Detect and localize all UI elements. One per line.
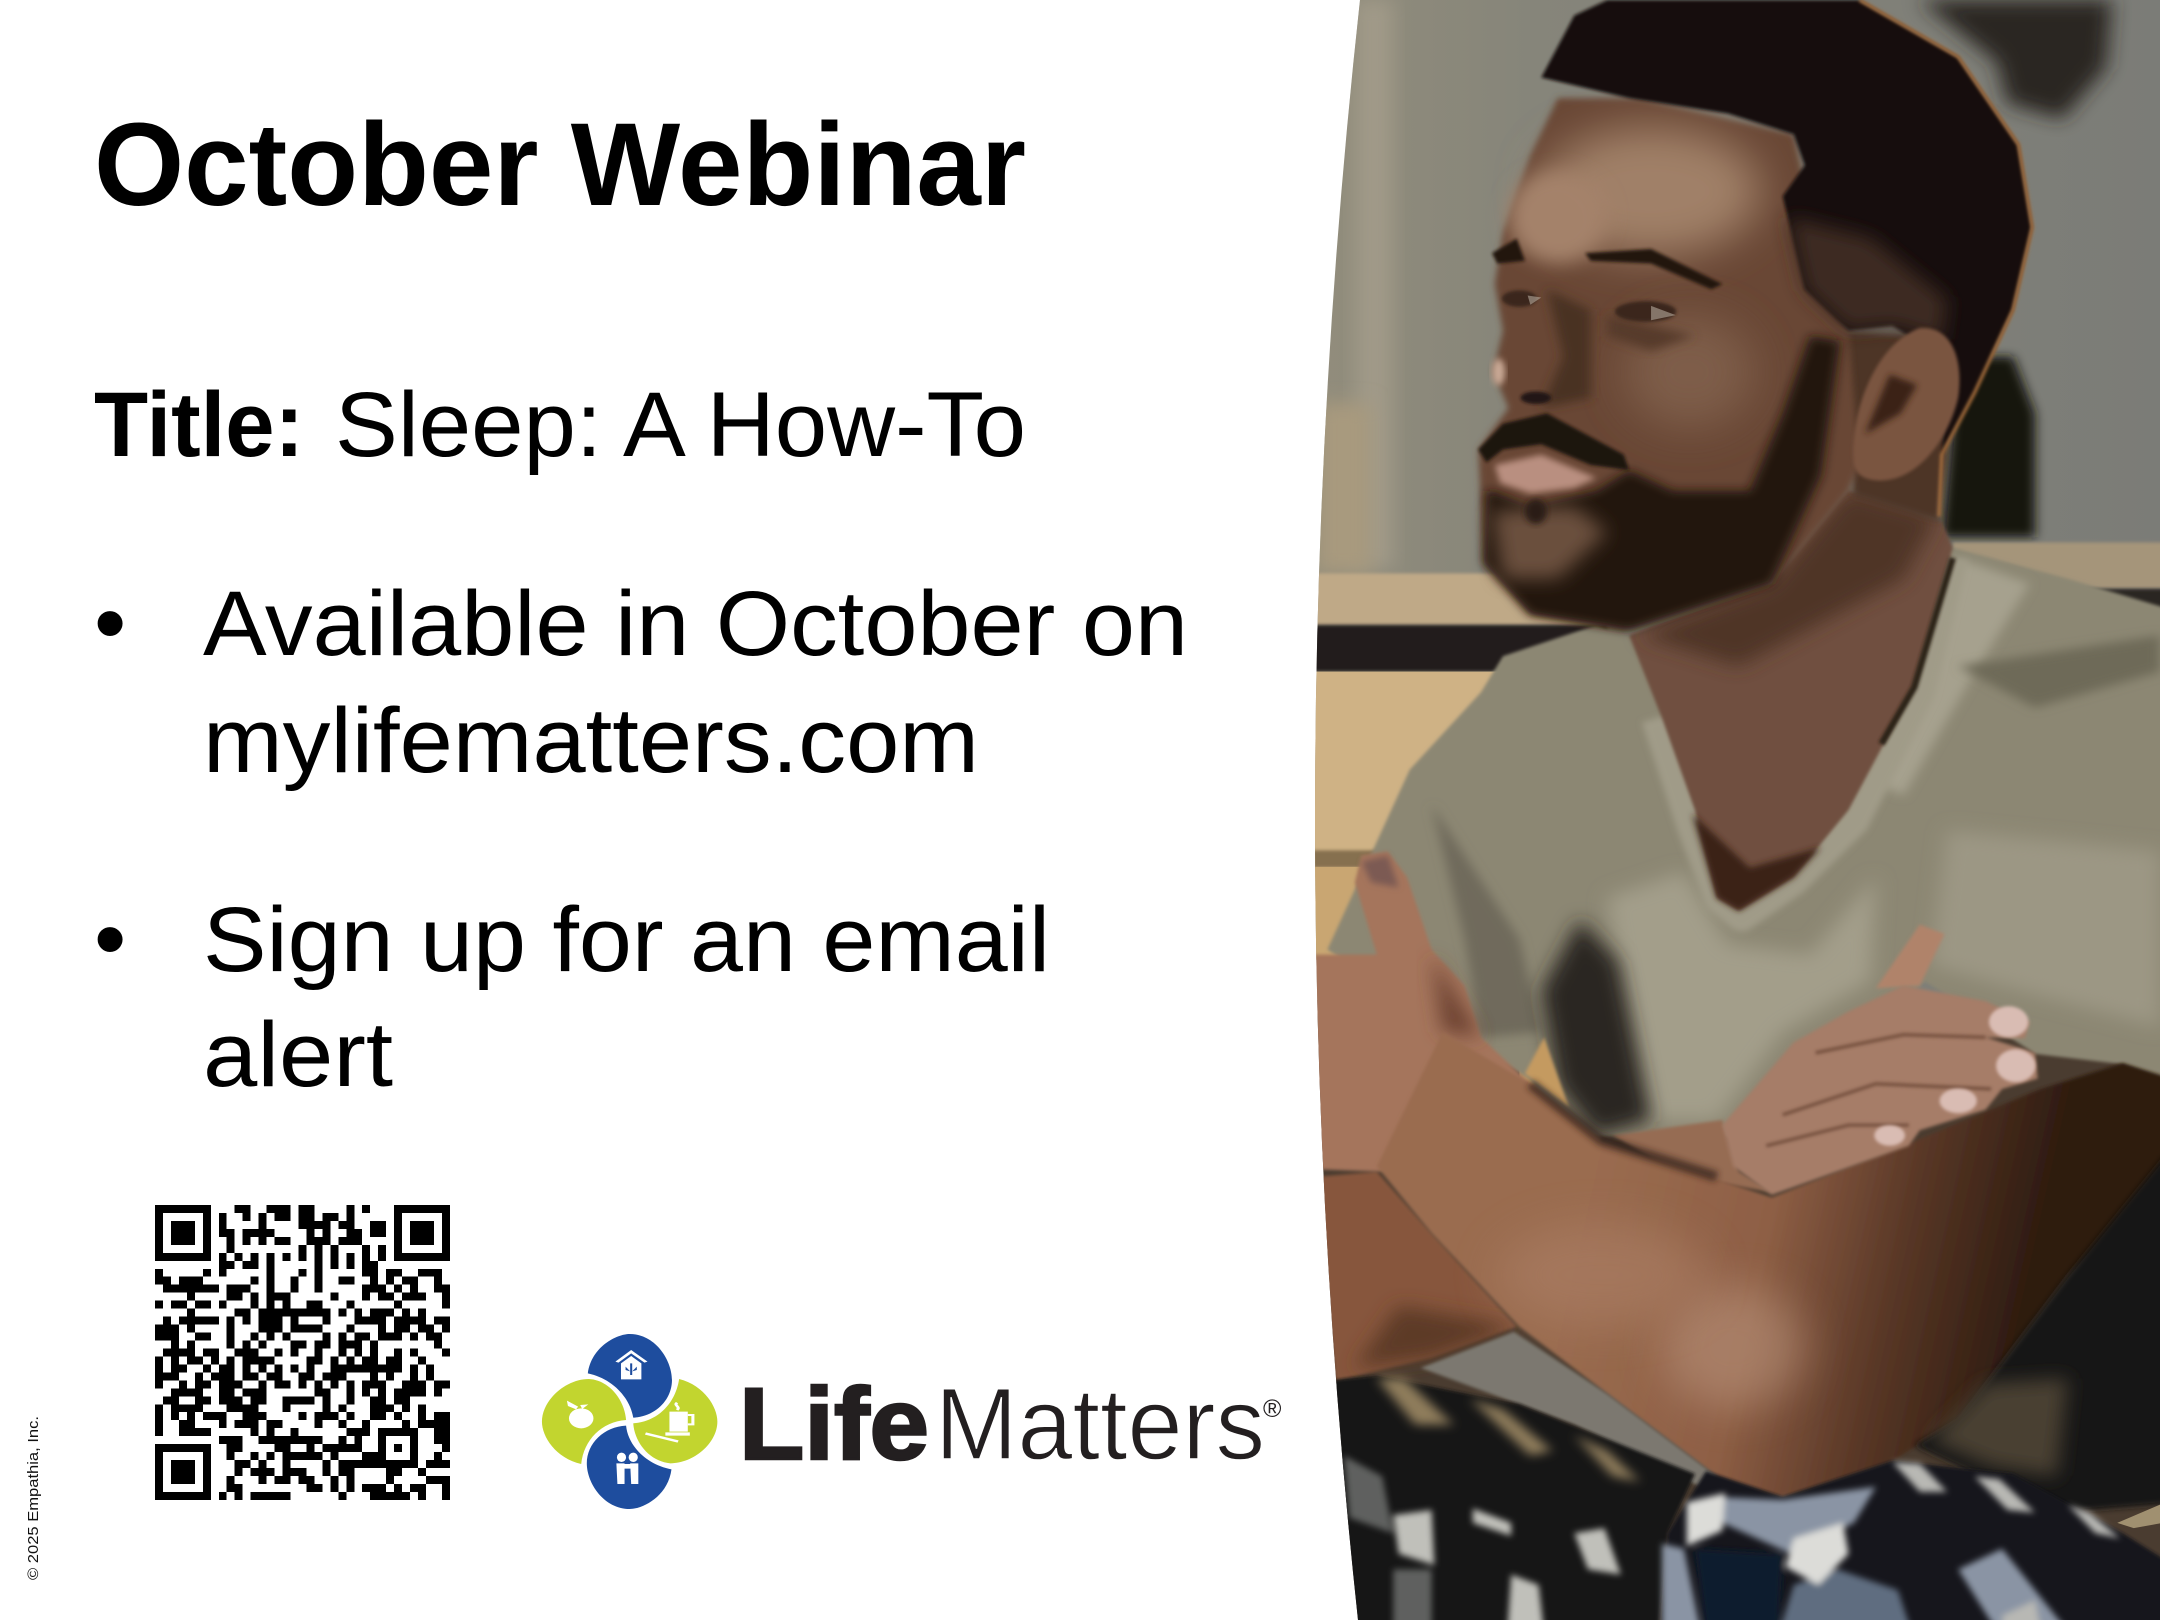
bullet: availability: Available in October on (203, 573, 1188, 675)
photo lower body: sheet and plaid trousers (1327, 1141, 2160, 1620)
photo background wall (1260, 0, 2160, 1620)
hair (1541, 0, 2032, 455)
bullet: email alert (94, 888, 1050, 1106)
skin behind ear (1838, 331, 1947, 522)
logo mark: four petals (542, 1334, 717, 1509)
lower forearm (1316, 1172, 1517, 1381)
brows and eyes (1492, 239, 1722, 289)
bullet: availability: mylifematters.com (203, 690, 979, 792)
photo: man sitting awake with arms crossed (1260, 0, 2160, 1620)
title: October Webinar (94, 99, 1026, 231)
forearm behind hand (1613, 1120, 1772, 1192)
beard and moustache (1484, 336, 1840, 630)
dark shadow at right (1914, 1141, 2160, 1513)
neck and chest (1629, 491, 1953, 911)
right trouser leg (1659, 1461, 2160, 1620)
bullet: email alert: alert (203, 1004, 393, 1106)
bullet: availability (94, 572, 1188, 792)
main arm (1377, 1032, 2160, 1497)
logo wordmark: ® (1263, 1395, 1282, 1423)
LifeMatters logo (542, 1334, 1282, 1509)
bullet: email alert: • (94, 888, 126, 990)
ear (1853, 328, 1960, 480)
bullet: email alert: Sign up for an email (203, 889, 1050, 991)
photo t-shirt (1327, 548, 2160, 1137)
photo arms and hands (1311, 851, 2160, 1497)
QR code (155, 1205, 450, 1500)
face (1478, 98, 1859, 630)
logo wordmark (739, 1367, 1282, 1481)
webinar title line: Title: (94, 374, 304, 476)
sheet (1421, 1332, 1717, 1487)
webinar title line: Sleep: A How-To (335, 374, 1026, 476)
photo head and neck (1478, 0, 2032, 911)
thumb and left hand (1316, 851, 1529, 1173)
copyright: © 2025 Empathia, Inc. (25, 1416, 42, 1580)
logo wordmark: Matters (935, 1367, 1265, 1481)
right hand (1876, 925, 1944, 988)
logo wordmark: Life (739, 1367, 929, 1481)
left trouser leg (1327, 1376, 1695, 1620)
bullet: availability: • (94, 572, 126, 674)
